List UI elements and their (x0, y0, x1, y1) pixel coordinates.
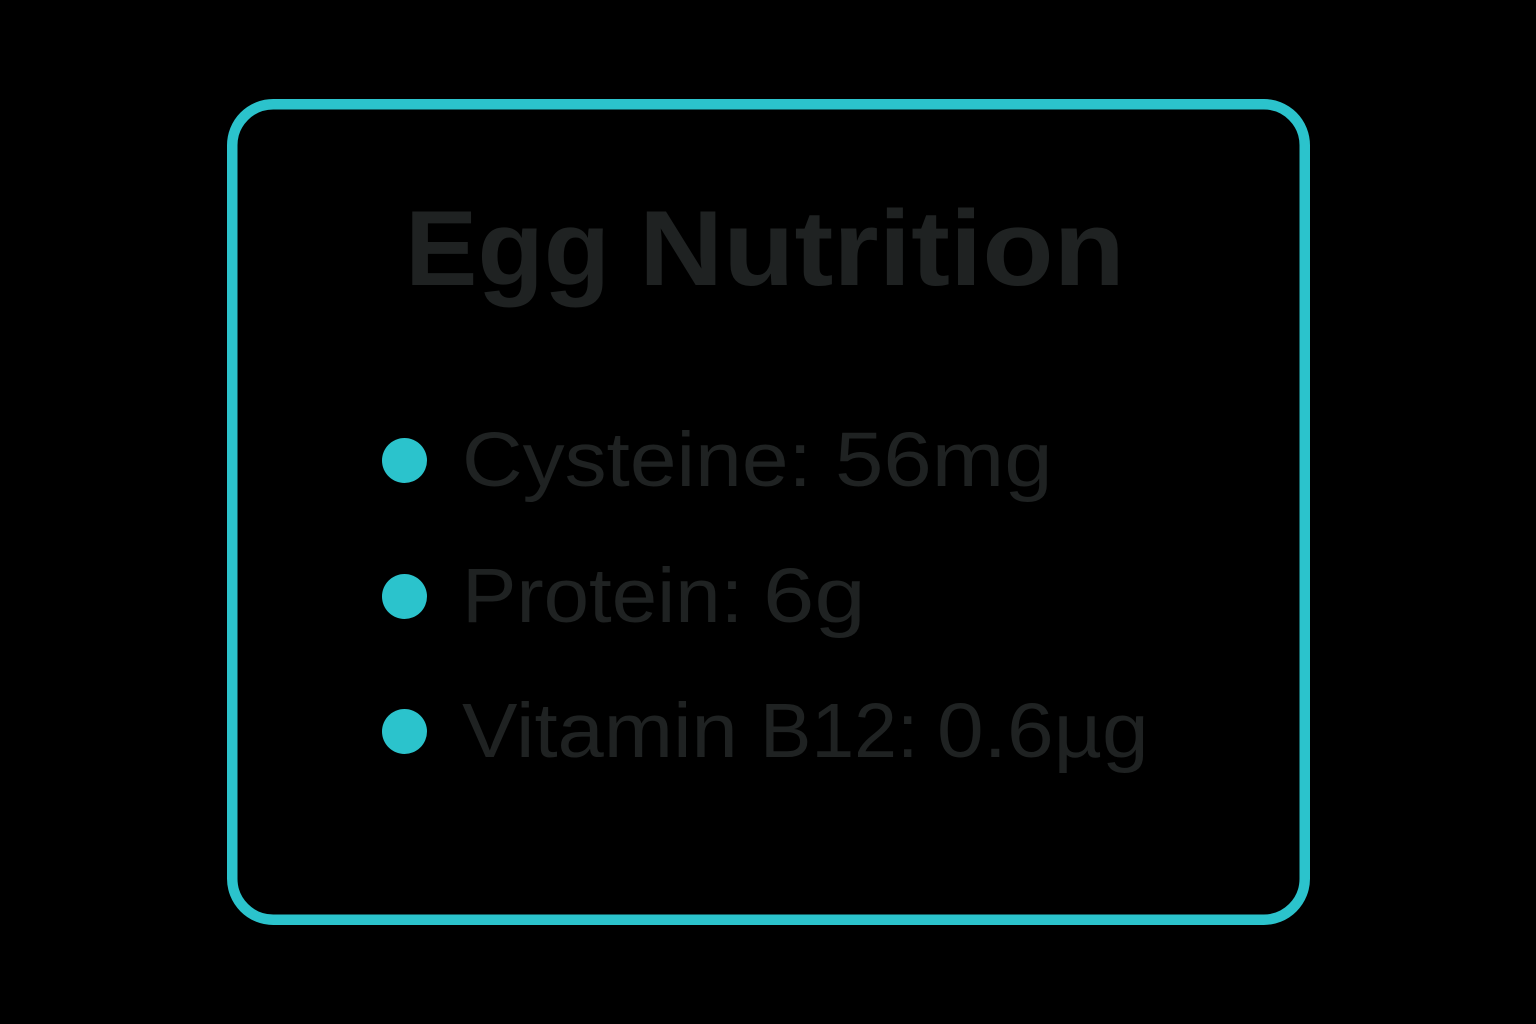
label: cysteine (462, 417, 1053, 503)
icon: bullet (382, 709, 427, 754)
list item: vitamin b12 (382, 688, 1149, 774)
label: vitamin b12: B12: (760, 688, 918, 774)
label: protein: Protein: (462, 553, 743, 639)
label: vitamin b12: Vitamin (462, 688, 738, 774)
label: vitamin b12: 0.6µg (937, 688, 1149, 774)
label: cysteine: 56mg (835, 417, 1053, 503)
panel: egg nutrition card (227, 99, 1310, 925)
label: cysteine: Cysteine: (462, 417, 812, 503)
list item: cysteine (382, 417, 1053, 503)
title: Nutrition (639, 188, 1125, 308)
title: Egg (405, 188, 610, 308)
icon: bullet (382, 574, 427, 619)
label: protein (462, 553, 866, 639)
title (405, 188, 1125, 308)
list item: protein (382, 553, 866, 639)
label: protein: 6g (763, 553, 866, 639)
icon: bullet (382, 438, 427, 483)
label: vitamin b12 (462, 688, 1149, 774)
